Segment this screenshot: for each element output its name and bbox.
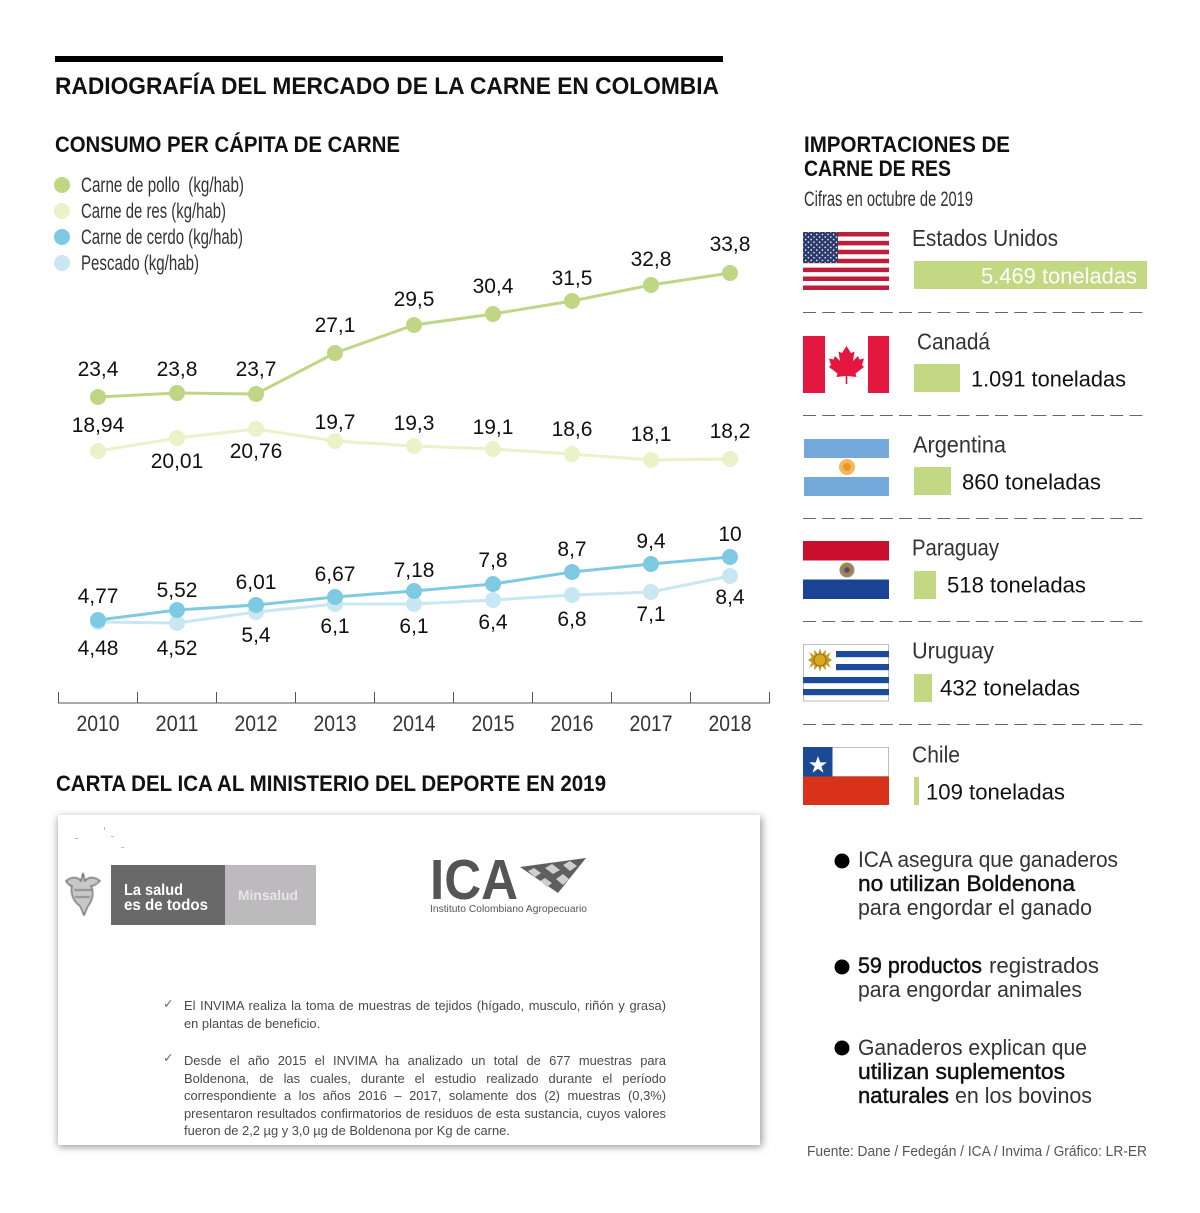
series: carne de pollo: 31,5	[552, 267, 592, 290]
legend item: pollo	[54, 174, 244, 197]
series: carne de pollo: 23,8	[157, 358, 197, 381]
legend item: pescado: Pescado (kg/hab)	[81, 252, 199, 275]
legend	[54, 174, 244, 275]
note: 59 productos: para engordar animales	[858, 977, 1082, 1002]
x axis: 2015	[472, 711, 514, 736]
panel: scanned letter	[58, 815, 762, 1147]
legend item: cerdo: Carne de cerdo (kg/hab)	[81, 226, 243, 249]
line chart	[58, 233, 770, 736]
note: ganaderos explican	[834, 1035, 1092, 1108]
icon: flag of Paraguay	[803, 541, 889, 599]
title bar	[55, 56, 723, 62]
note: ICA asegura: ICA asegura que ganaderos	[858, 847, 1118, 872]
letter text: first point: en plantas de beneficio.	[184, 1016, 320, 1031]
row: Paraguay: Paraguay	[912, 534, 999, 560]
series: pescado: 6,4	[478, 611, 508, 634]
row: Canadá: Canadá	[917, 328, 990, 354]
series: carne de res: 19,1	[473, 416, 513, 439]
icon: flag of Chile	[803, 747, 889, 805]
series: carne de pollo	[78, 233, 750, 405]
x axis: 2018	[708, 711, 752, 736]
logo: minsalud: Minsalud	[238, 888, 298, 903]
row: Uruguay	[803, 638, 1080, 702]
x axis: 2014	[392, 711, 436, 736]
x axis: 2013	[314, 711, 356, 736]
x axis: 2011	[156, 711, 198, 736]
x axis	[58, 692, 770, 736]
letter text: second point: presentaron resultados confirmatorios de residuos de esta sustancia, cuyos valores	[184, 1106, 666, 1120]
note: ICA asegura: no utilizan Boldenona	[858, 871, 1075, 896]
series: pescado: 7,1	[636, 603, 666, 626]
legend item: res: Carne de res (kg/hab)	[81, 200, 226, 223]
series: carne de cerdo: 10	[718, 523, 742, 546]
letter text: second point: Boldenona, de las cuales, durante el estudio realizado durante el período	[184, 1070, 666, 1086]
series: carne de res: 20,01	[151, 450, 203, 473]
series: carne de pollo: 32,8	[631, 248, 671, 271]
logo: ICA: ICA	[430, 848, 518, 912]
heading: importaciones	[804, 132, 1010, 181]
letter text: second point: fueron de 2,2 µg y 3,0 µg de Boldenona por Kg de carne.	[184, 1123, 510, 1138]
row: Argentina: 860 toneladas	[962, 470, 1101, 494]
logo: ICA: Instituto Colombiano Agropecuario	[430, 903, 587, 915]
letter text: second point: correspondiente a los años 2016 – 2017, solamente dos (2) muestras (0,3%)	[184, 1088, 666, 1103]
series: carne de res	[72, 411, 750, 473]
note: 59 productos	[834, 953, 1099, 1002]
row: Uruguay: 432 toneladas	[940, 676, 1080, 700]
row: Canadá	[803, 328, 1126, 393]
series: carne de res: 18,94	[72, 414, 125, 437]
row: Estados Unidos: Estados Unidos	[912, 225, 1058, 251]
row: Argentina	[804, 432, 1101, 496]
x axis: 2017	[630, 711, 672, 736]
series: pescado: 4,52	[157, 637, 197, 660]
icon: flag of United States	[803, 232, 889, 290]
series: pescado: 6,8	[557, 608, 587, 631]
letter text: first point	[163, 997, 674, 1037]
series: pescado: 6,1	[399, 615, 429, 638]
row: Chile: Chile	[912, 742, 960, 768]
series: carne de res: 18,1	[631, 423, 671, 446]
x axis: 2016	[550, 711, 594, 736]
series: carne de cerdo: 4,77	[78, 585, 118, 608]
series: pescado: 8,4	[715, 586, 745, 609]
series: carne de pollo: 23,4	[78, 358, 119, 381]
icon: flag of Canada	[803, 336, 889, 393]
heading: importaciones: IMPORTACIONES DE	[804, 132, 1010, 157]
logo: minsalud	[111, 865, 316, 925]
series: pescado: 5,4	[241, 624, 271, 647]
series: carne de res: 20,76	[230, 440, 282, 463]
legend item: res	[54, 200, 226, 223]
series: carne de cerdo: 6,67	[315, 563, 355, 586]
letter text: first point: El INVIMA realiza la toma de muestras de tejidos (hígado, musculo, riñón y grasa)	[184, 998, 666, 1013]
logo: ICA	[430, 848, 587, 915]
icon: flag of Uruguay	[803, 644, 889, 701]
title: RADIOGRAFÍA DEL MERCADO DE LA CARNE EN COLOMBIA	[55, 72, 719, 100]
logo: coat of arms	[66, 873, 100, 915]
note: ganaderos explican: utilizan suplementos	[858, 1059, 1065, 1084]
note: ganaderos explican: naturales	[858, 1083, 949, 1108]
row: Argentina: Argentina	[913, 432, 1006, 458]
letter text: first point: ✓	[163, 997, 173, 1011]
series: carne de res: 19,3	[394, 412, 434, 435]
series: carne de cerdo: 7,8	[478, 549, 508, 572]
icon: flag of Argentina	[804, 439, 889, 496]
source: Fuente: Dane / Fedegán / ICA / Invima / Gráfico: LR-ER	[807, 1143, 1147, 1160]
row: Uruguay: Uruguay	[912, 638, 994, 664]
series: carne de res: 18,2	[710, 420, 750, 443]
note: ganaderos explican: en los bovinos	[955, 1083, 1092, 1108]
x axis: 2012	[234, 711, 278, 736]
letter text: second point	[163, 1051, 674, 1144]
note: ICA asegura: para engordar el ganado	[858, 895, 1092, 920]
note: 59 productos: registrados	[989, 953, 1099, 978]
series: carne de pollo: 23,7	[236, 358, 276, 381]
row: Estados Unidos: 5.469 toneladas	[981, 264, 1137, 288]
row: Paraguay	[803, 534, 1086, 599]
series: pescado	[78, 568, 745, 660]
heading: importaciones: CARNE DE RES	[804, 156, 951, 181]
series: carne de pollo: 27,1	[315, 314, 355, 337]
series: carne de cerdo: 6,01	[236, 571, 276, 594]
row: Paraguay: 518 toneladas	[947, 572, 1086, 598]
logo: minsalud: La salud	[124, 882, 183, 899]
subheading: Cifras en octubre de 2019	[804, 188, 973, 211]
heading: carta del ICA: CARTA DEL ICA AL MINISTERIO DEL DEPORTE EN 2019	[56, 771, 606, 796]
series: carne de cerdo: 7,18	[394, 559, 434, 582]
row: Canadá: 1.091 toneladas	[971, 366, 1126, 392]
series: pescado: 4,48	[78, 637, 118, 660]
note: 59 productos: 59 productos	[858, 953, 982, 978]
series: carne de res: 18,6	[552, 418, 592, 441]
letter text: second point: ✓	[163, 1051, 173, 1065]
series: carne de cerdo: 9,4	[636, 530, 666, 553]
x axis: 2010	[76, 711, 120, 736]
series: carne de cerdo	[78, 523, 742, 628]
note: ICA asegura	[834, 847, 1118, 920]
series: carne de cerdo: 5,52	[157, 579, 197, 602]
series: carne de cerdo: 8,7	[557, 538, 587, 561]
series: pescado: 6,1	[320, 615, 350, 638]
legend item: pescado	[54, 252, 199, 275]
legend item: cerdo	[54, 226, 243, 249]
note: ganaderos explican: Ganaderos explican que	[858, 1035, 1087, 1060]
series: carne de pollo: 29,5	[394, 288, 434, 311]
logo: minsalud: es de todos	[124, 897, 208, 914]
series: carne de pollo: 33,8	[710, 233, 750, 256]
series: carne de res: 19,7	[315, 411, 355, 434]
legend item: pollo: Carne de pollo (kg/hab)	[81, 174, 244, 197]
row: Chile	[803, 742, 1065, 805]
letter text: second point: Desde el año 2015 el INVIMA ha analizado un total de 677 muestras para	[184, 1053, 666, 1068]
series: carne de pollo: 30,4	[473, 275, 514, 298]
heading: consumo per cápita: CONSUMO PER CÁPITA DE CARNE	[55, 132, 400, 157]
row: Chile: 109 toneladas	[926, 780, 1065, 804]
row: Estados Unidos	[803, 225, 1147, 290]
